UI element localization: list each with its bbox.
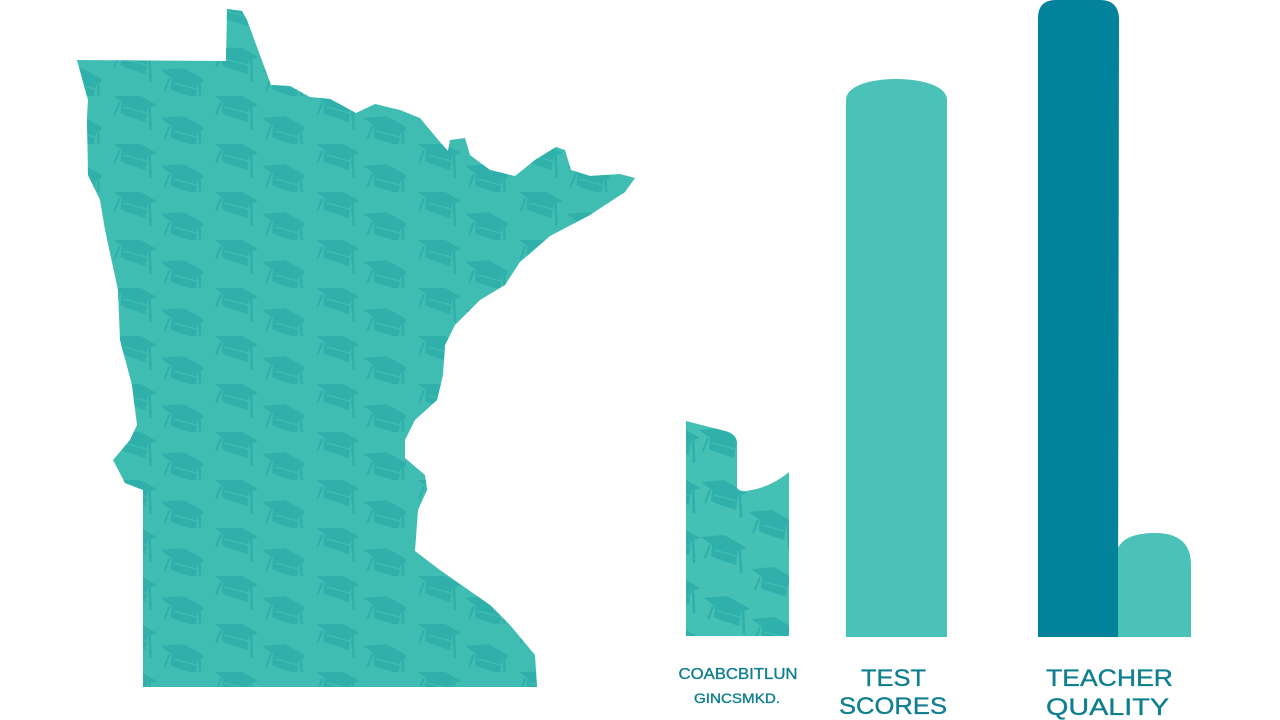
- label: teacher quality: TEACHER: [1046, 665, 1173, 692]
- bar: patterned first bar: [686, 421, 789, 636]
- bar: teacher quality light: [1118, 533, 1191, 637]
- label: first bar: GINCSMKD.: [694, 691, 780, 706]
- label: first bar: COABCBITLUN: [678, 666, 798, 683]
- label: test scores: [839, 665, 947, 720]
- label: test scores: TEST: [861, 665, 926, 692]
- label: test scores: SCORES: [839, 693, 947, 720]
- label: first bar: [678, 666, 798, 706]
- bar: test scores: [846, 79, 947, 637]
- label: teacher quality: [1046, 665, 1173, 720]
- map: Minnesota filled with graduation caps: [77, 9, 635, 687]
- bar: teacher quality dark: [1038, 0, 1119, 637]
